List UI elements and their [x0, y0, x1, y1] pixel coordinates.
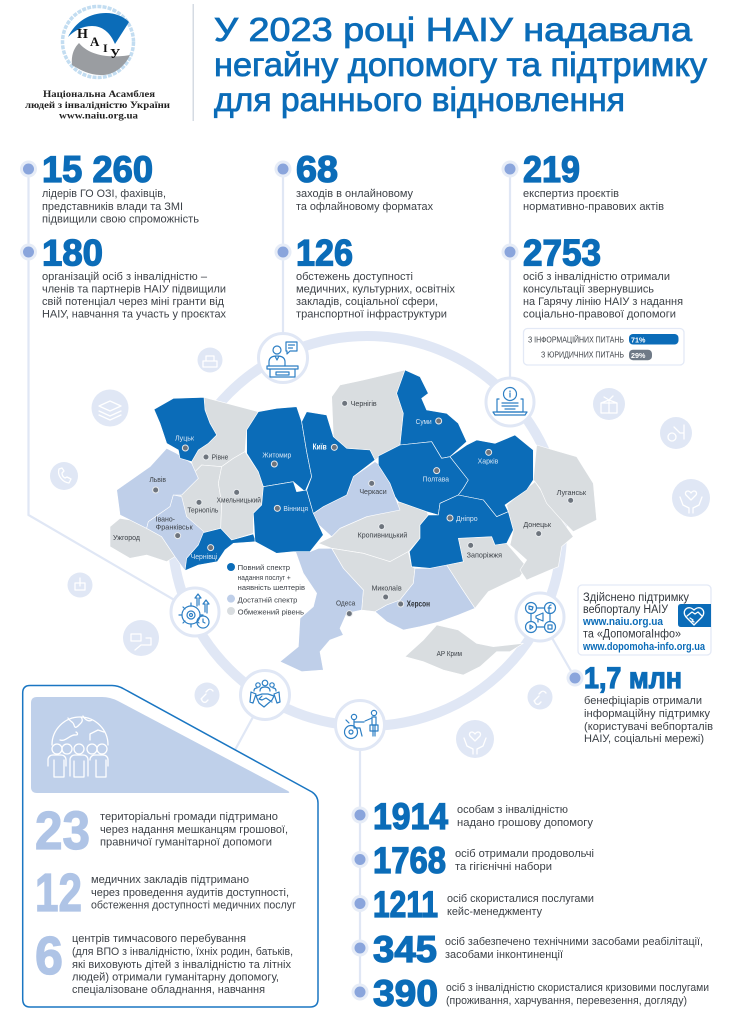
- organisation name: [25, 89, 171, 122]
- logo: А: [90, 34, 100, 49]
- logo: І: [103, 41, 108, 55]
- organisation name: Національна Асамблея: [43, 89, 155, 100]
- city names: Хмельницький: [217, 496, 261, 505]
- map of Ukraine: [110, 370, 597, 675]
- icon: heart handshake: [678, 604, 711, 627]
- stat: 1211: [352, 884, 594, 925]
- stat: 23: правничої гуманітарної допомоги: [100, 837, 272, 849]
- organisation name: людей з інвалідністю України: [25, 100, 171, 111]
- bar chart: question types: З ЮРИДИЧНИХ ПИТАНЬ: [541, 350, 624, 360]
- stat: 1,7 млн: [566, 662, 713, 745]
- stat: 390: осіб з інвалідністю скористалися кризовими послугами: [446, 982, 709, 994]
- stat: 1768: 1768: [373, 840, 446, 881]
- stat: 12: обстеження доступності медичних послуг: [91, 900, 296, 912]
- stat: 219: експертиз проєктів: [523, 188, 619, 200]
- callout: web portals: вебпорталу НАІУ: [583, 604, 669, 616]
- city names: Харків: [478, 457, 498, 466]
- stat: 390: [352, 973, 709, 1014]
- stat: 12: через проведення аудитів доступності,: [91, 887, 289, 899]
- title: для раннього відновлення: [214, 81, 625, 118]
- stat: 68: [274, 149, 433, 213]
- city names: Кропивницький: [358, 531, 407, 540]
- stat: 390: (проживання, харчування, перевезення, догляду): [446, 995, 687, 1007]
- stat: 219: нормативно-правових актів: [523, 201, 664, 213]
- stat: 6: які виховують дітей з інвалідністю та літніх: [72, 959, 292, 971]
- city names: Франківськ: [156, 522, 193, 531]
- regions limited level: [110, 370, 597, 675]
- city names: Дніпро: [456, 514, 478, 523]
- stat: 126: медичних, культурних, освітніх: [296, 284, 456, 296]
- city names: Ужгород: [113, 533, 140, 542]
- title: негайну допомогу та підтримку: [214, 46, 708, 83]
- stat: 2753: [502, 232, 683, 321]
- stat: 1211: 1211: [373, 884, 438, 925]
- stat: 180: 180: [42, 232, 103, 274]
- stat: 23: через надання мешканцям грошової,: [100, 824, 288, 836]
- stat: 345: 345: [373, 929, 437, 970]
- stat: 345: [352, 929, 703, 970]
- stat: 1914: [352, 796, 593, 837]
- callout: web portals: www.dopomoha-info.org.ua: [582, 641, 706, 653]
- icon: wheelchair with helper: [336, 700, 384, 750]
- city names: Луцьк: [175, 434, 195, 443]
- city names: Луганськ: [557, 488, 587, 497]
- city names: Чернігів: [351, 399, 377, 408]
- city names: Суми: [416, 417, 432, 426]
- stat: 1,7 млн: НАІУ, соціальні мережі): [584, 733, 704, 745]
- city markers: [153, 400, 574, 617]
- stat: 1211: осіб скористалися послугами: [447, 893, 594, 905]
- stat: 219: 219: [523, 149, 580, 190]
- title: [214, 11, 708, 118]
- stat: 126: обстежень доступності: [296, 271, 413, 283]
- icon: handshake and people: [240, 670, 290, 720]
- logo: У: [110, 47, 120, 62]
- stat: 15 260: підвищили свою спроможність: [42, 214, 199, 226]
- stat: 180: організацій осіб з інвалідністю –: [42, 271, 208, 283]
- icon: globe and people: [48, 716, 108, 777]
- city names: Чернівці: [191, 552, 218, 561]
- bar chart: question types: [524, 328, 684, 365]
- city names: Рівне: [212, 452, 228, 461]
- city names: Херсон: [407, 600, 430, 609]
- panel banner: [31, 697, 289, 793]
- stat: 2753: консультації звернувшись: [523, 284, 654, 296]
- stat: 68: 68: [296, 149, 338, 190]
- callout: web portals: [578, 585, 711, 655]
- stat: 2753: на Гарячу лінію НАІУ з надання: [523, 296, 683, 308]
- map legend: надання послуг +: [238, 573, 291, 582]
- stat: 180: свій потенціал через міні гранти від: [42, 296, 225, 308]
- stat: 180: [20, 232, 226, 321]
- city names: Житомир: [262, 450, 291, 459]
- stat: 12: 12: [35, 863, 82, 923]
- city names: Вінниця: [283, 504, 308, 513]
- callout: web portals: Здійснено підтримку: [583, 592, 689, 604]
- city names: Донецьк: [523, 520, 552, 529]
- map legend: Повний спектр: [238, 563, 290, 572]
- stat: 1211: кейс-менеджменту: [447, 906, 542, 918]
- stat: 1914: надано грошову допомогу: [457, 817, 593, 829]
- stat: 180: членів та партнерів НАІУ підвищили: [42, 284, 226, 296]
- icon: laptop with info: [486, 378, 534, 426]
- city names: [113, 399, 587, 658]
- city names: Київ: [313, 442, 327, 451]
- city names: Львів: [149, 475, 166, 484]
- stat: 15 260: 15 260: [42, 149, 153, 190]
- stat: 15 260: [20, 149, 199, 226]
- stat: 1,7 млн: інформаційну підтримку: [584, 708, 711, 720]
- stat: 23: [35, 801, 288, 861]
- stat: 1,7 млн: 1,7 млн: [584, 662, 682, 695]
- stat: 6: людей) отримали гуманітарну допомогу,: [72, 972, 279, 984]
- stat: 6: спеціалізоване обладнання, навчання: [72, 984, 265, 996]
- city names: Одеса: [336, 599, 356, 608]
- stat: 126: 126: [296, 232, 353, 274]
- decorative circles with pale icons: [50, 348, 710, 758]
- stat: 219: [502, 149, 664, 213]
- stat: 68: та офлайновому форматах: [296, 201, 433, 213]
- header divider: [192, 4, 194, 121]
- stat: 23: 23: [35, 801, 90, 861]
- city names: АР Крим: [437, 649, 462, 658]
- stat: 345: засобами інконтиненції: [445, 949, 563, 961]
- stat: 1768: та гігієнічні набори: [455, 861, 552, 873]
- stat: 1768: осіб отримали продовольчі: [455, 848, 594, 860]
- stat: 15 260: лідерів ГО ОЗІ, фахівців,: [42, 188, 166, 200]
- map legend: Достатній спектр: [238, 595, 297, 604]
- stat: 126: транспортної інфраструктури: [296, 309, 447, 321]
- stat: 2753: соціально-правової допомоги: [523, 309, 676, 321]
- stat: 1768: [352, 840, 594, 881]
- regions sufficient level: [117, 448, 475, 672]
- city names: Черкаси: [359, 487, 387, 496]
- stat: 1,7 млн: бенефіціарів отримали: [584, 695, 702, 707]
- stat: 2753: осіб з інвалідністю отримали: [523, 271, 670, 283]
- panel: communities: [23, 686, 318, 1007]
- bar chart: question types: 29%: [631, 351, 646, 360]
- organisation name: www.naiu.org.ua: [59, 110, 138, 122]
- stat: 126: [274, 232, 456, 321]
- city names: Миколаїв: [372, 584, 402, 593]
- stat: 68: заходів в онлайновому: [296, 188, 413, 200]
- connector lines: [28, 169, 575, 992]
- logo: [62, 6, 134, 78]
- stat: 2753: 2753: [523, 232, 601, 274]
- callout: web portals: та «ДопомогаІнфо»: [583, 628, 681, 640]
- city names: Івано-: [156, 514, 175, 523]
- stat: 1,7 млн: (користувачі вебпорталів: [584, 721, 713, 733]
- stat: 6: 6: [35, 926, 63, 986]
- stat: 6: (для ВПО з інвалідністю, їхніх родин, батьків,: [72, 946, 293, 958]
- stat: 12: медичних закладів підтримано: [91, 874, 249, 886]
- map legend: наявність шелтерів: [238, 583, 305, 592]
- stat: 23: територіальні громади підтримано: [100, 811, 278, 823]
- bar chart: question types: 71%: [631, 335, 646, 344]
- city names: Тернопіль: [187, 506, 218, 515]
- icon: social media network: [516, 593, 564, 641]
- icon: presenter at desk: [258, 334, 308, 382]
- ring connecting the icons: [172, 336, 562, 726]
- logo: Н: [77, 27, 88, 42]
- stat: 390: 390: [373, 973, 438, 1014]
- stat: 15 260: представників влади та ЗМІ: [42, 201, 183, 213]
- city names: Запоріжжя: [467, 551, 502, 560]
- bar chart: question types: З ІНФОРМАЦІЙНИХ ПИТАНЬ: [528, 336, 624, 344]
- map legend: [227, 563, 305, 616]
- stat: 6: центрів тимчасового перебування: [72, 933, 246, 945]
- callout: web portals: www.naiu.org.ua: [582, 616, 664, 628]
- city names: Полтава: [423, 475, 450, 484]
- icon: gears, arrows and clock: [171, 588, 219, 636]
- stat: 345: осіб забезпечено технічними засобами реабілітації,: [445, 936, 703, 948]
- stat: 126: закладів, соціальної сфери,: [296, 296, 438, 308]
- stat: 12: [35, 863, 296, 923]
- stat: 1914: особам з інвалідністю: [457, 804, 568, 816]
- stat: 6: [35, 926, 293, 996]
- stat: 1914: 1914: [373, 796, 448, 837]
- title: У 2023 році НАІУ надавала: [214, 11, 693, 48]
- stat: 180: НАІУ, навчання та участь у проєктах: [42, 309, 226, 321]
- map legend: Обмежений рівень: [238, 607, 304, 616]
- regions full spectrum: [154, 370, 533, 571]
